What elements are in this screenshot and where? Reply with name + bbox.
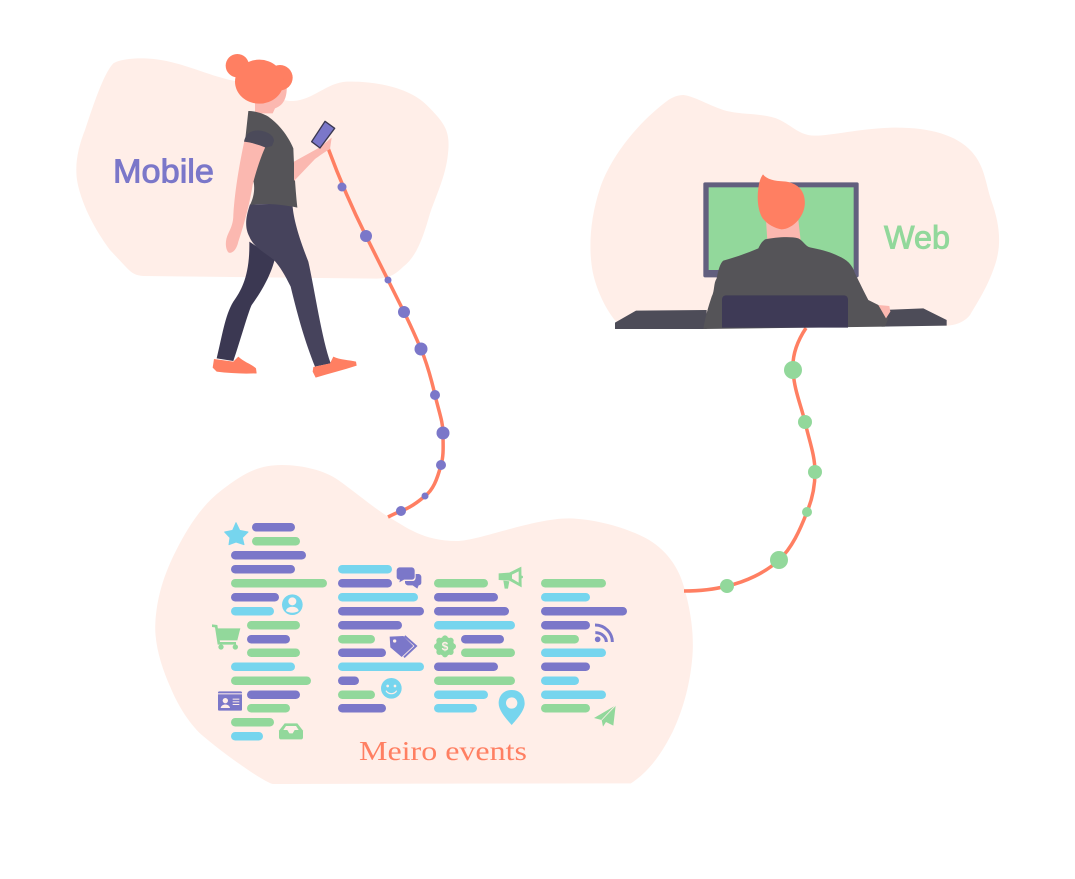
monitor screen xyxy=(709,187,854,270)
icon: map pin xyxy=(499,690,525,725)
sleeve xyxy=(244,130,274,148)
label: Mobile: Mobile xyxy=(113,152,214,190)
far arm xyxy=(294,138,332,181)
desk left xyxy=(615,310,707,329)
monitor xyxy=(703,182,859,277)
front leg and hips xyxy=(246,204,331,367)
icon: dollar badge: $ xyxy=(442,640,449,654)
right shoe xyxy=(313,357,357,378)
event bars: column 2 xyxy=(338,565,424,712)
icon: dollar badge xyxy=(434,635,456,657)
hand xyxy=(878,305,890,318)
man at desk xyxy=(615,174,947,329)
woman walking with phone xyxy=(213,54,357,378)
icon: smiley xyxy=(381,678,402,699)
neck and face xyxy=(255,85,287,113)
phone xyxy=(312,121,335,148)
icon: user xyxy=(282,594,303,615)
icon: RSS feed xyxy=(595,625,612,642)
near arm xyxy=(226,141,266,253)
icon: speech bubbles xyxy=(397,567,421,589)
left shoe xyxy=(213,357,257,374)
panel: Meiro events background blob xyxy=(155,465,693,784)
neck xyxy=(766,220,801,241)
desk right xyxy=(882,308,947,327)
back leg xyxy=(217,242,275,361)
chair xyxy=(722,295,848,328)
icon: price tags xyxy=(390,636,416,657)
icons: right group xyxy=(434,567,616,727)
icon: star xyxy=(225,523,248,545)
event bars: column 1 xyxy=(231,523,327,740)
web event path xyxy=(684,328,822,593)
label: Meiro events: Meiro events xyxy=(359,736,527,766)
icon: paper plane xyxy=(594,705,616,727)
shirt xyxy=(245,111,297,208)
icon: megaphone xyxy=(499,567,523,589)
icon: shopping cart xyxy=(212,624,240,650)
event bars: column 4 xyxy=(541,579,627,712)
label: Web: Web xyxy=(884,220,950,256)
hair xyxy=(226,54,293,104)
icons: left group xyxy=(212,523,421,739)
hair xyxy=(758,174,805,229)
icon: ID card xyxy=(218,691,242,711)
panel: web background blob xyxy=(590,95,999,326)
event bars: column 3 xyxy=(434,579,515,712)
mobile event path xyxy=(328,148,450,517)
icon: inbox tray xyxy=(279,723,303,739)
jacket xyxy=(703,237,888,329)
panel: mobile background blob xyxy=(76,58,449,279)
